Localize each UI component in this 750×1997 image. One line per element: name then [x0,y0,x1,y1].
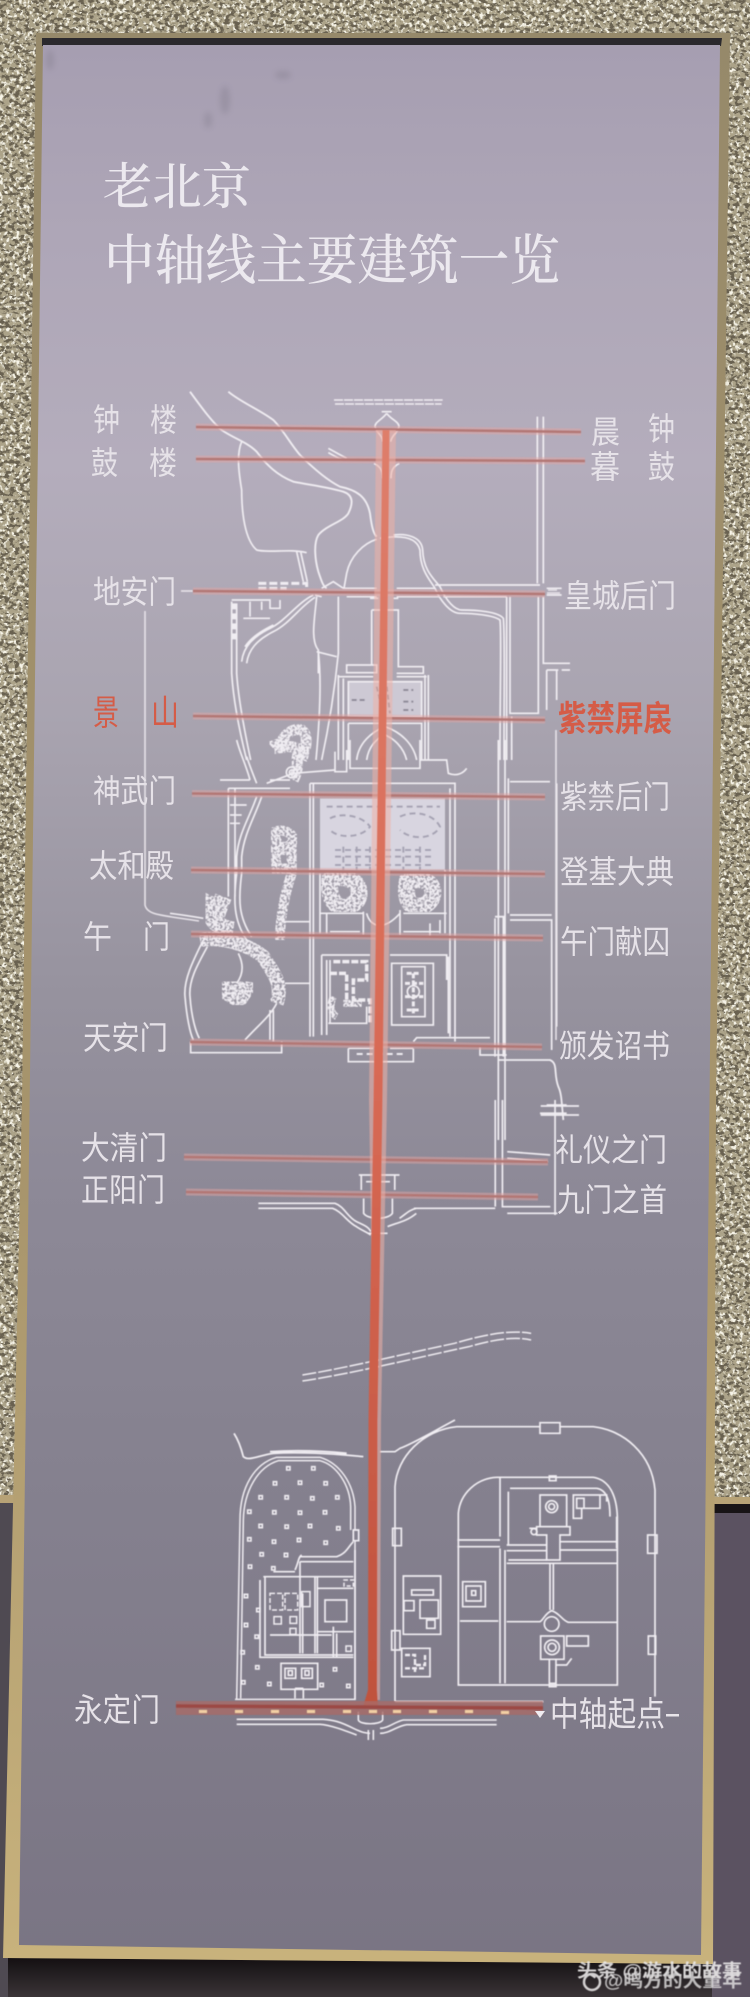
label: 暮鼓: 鼓 [648,449,675,485]
title: 中轴线主要建筑一览 [104,231,560,291]
label: 地安门: 地安门 [93,574,176,610]
label: 午门献囚: 午门献囚 [560,924,670,960]
map: Yongding gate and southern moat [237,1712,497,1740]
label: 鼓楼: 楼 [149,445,177,481]
panel smudges [46,50,291,128]
label: 暮鼓: 暮 [590,449,620,485]
right labels [550,411,679,1734]
label: 永定门: 永定门 [74,1692,160,1728]
map: Temple of Agriculture [234,1433,363,1700]
label: 正阳门: 正阳门 [81,1172,165,1208]
label: 紫禁后门: 紫禁后门 [560,779,670,815]
label: 午门: 门 [143,919,170,955]
label: 景山: 景 [93,694,119,733]
label: 午门 [83,919,170,955]
label: 景山 [93,694,179,733]
label: 颁发诏书: 颁发诏书 [559,1028,670,1064]
central axis line [363,430,396,1707]
watermark: @鸣方的大董年 [604,1970,742,1991]
watermark: 头条 @游水的故事 [577,1960,742,1981]
label: 太和殿: 太和殿 [89,848,174,884]
Yongding gate line [176,1701,543,1715]
red horizontal connector lines [184,427,585,1197]
panel shadow edge [42,38,722,46]
label: 晨钟: 钟 [648,411,675,447]
label: 中轴起点: 中轴起点 [550,1696,665,1734]
label: 天安门: 天安门 [83,1020,168,1056]
watermark [577,1960,742,1991]
label: 钟楼: 钟 [93,402,120,438]
label: 暮鼓 [590,449,675,485]
label: 晨钟 [591,411,675,450]
label: 鼓楼: 鼓 [91,445,118,481]
arrow: axis start marker [535,1711,545,1718]
line: core [184,427,585,1197]
background: textured wall [0,0,750,1510]
label: 钟楼: 楼 [150,402,177,438]
label: 景山: 山 [151,694,179,733]
map: Temple of Heaven [380,1420,657,1702]
map: central axis plan [145,392,657,1740]
title [103,159,560,291]
label: 神武门: 神武门 [93,773,176,809]
left labels [74,402,179,1728]
label: 钟楼 [93,402,177,438]
label: 皇城后门: 皇城后门 [564,578,676,614]
map: Forbidden City and Imperial City [170,740,567,1140]
gate line markers [199,1710,509,1714]
label: 礼仪之门: 礼仪之门 [555,1132,667,1168]
map: Qianmen gate and river [258,1100,579,1381]
label: 午门: 午 [83,919,112,955]
background: dark lower wall [0,1495,750,1997]
line: halo [184,427,585,1197]
label: 登基大典: 登基大典 [560,854,674,890]
title: 老北京 [103,159,251,215]
label: 大清门: 大清门 [81,1130,167,1166]
label: 鼓楼 [91,445,177,481]
map: bracket to left labels [145,590,560,1040]
label: 紫禁屏扆: 紫禁屏扆 [558,700,672,739]
map: northern lakes and roads [190,392,570,760]
label: 九门之首: 九门之首 [557,1182,667,1218]
label: 晨钟: 晨 [591,414,620,450]
